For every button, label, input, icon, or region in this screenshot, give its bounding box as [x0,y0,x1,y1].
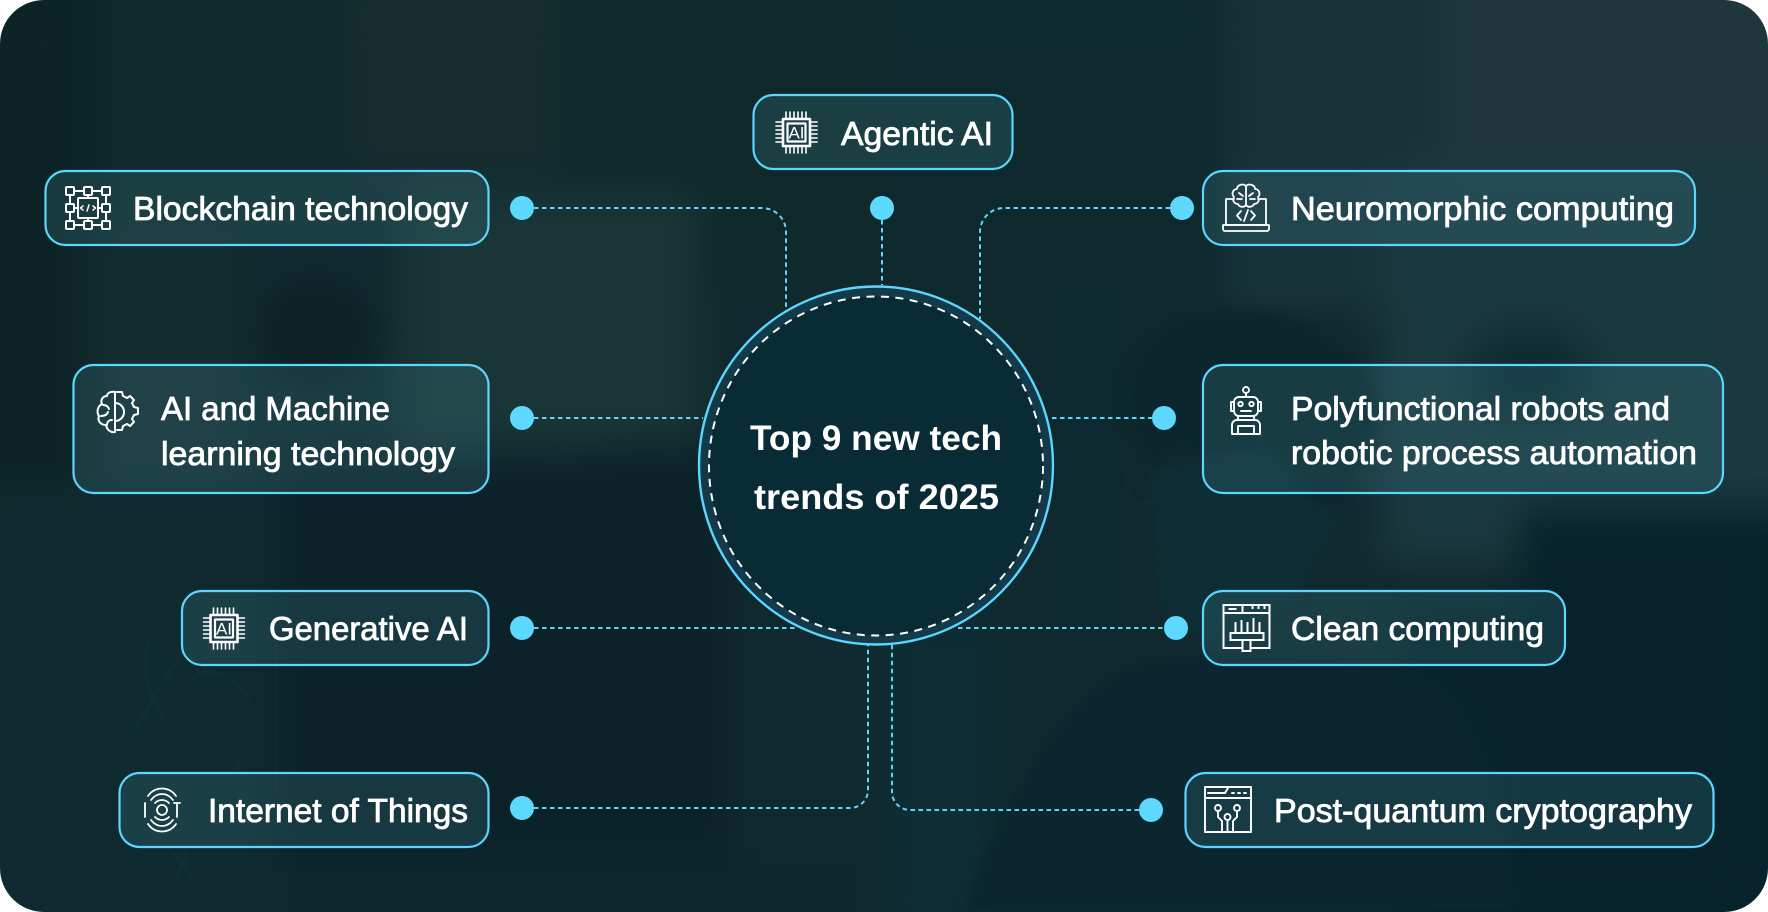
panel: AI and Machine learning technology: AI and Machine [161,390,390,427]
hub title: trends of 2025 [754,478,999,517]
panel: Agentic AI [754,95,1012,169]
panel: Post-quantum cryptography: Post-quantum cryptography [1274,792,1693,829]
panel: Blockchain technology [46,171,488,245]
panel: AI and Machine learning technology: learning technology [161,435,455,472]
hub title: Top 9 new tech [750,419,1002,458]
panel: Generative AI [182,591,488,665]
panel: Polyfunctional robots and robotic process automation: robotic process automation [1291,434,1697,471]
panel: Polyfunctional robots and robotic process automation: Polyfunctional robots and [1291,390,1670,427]
panel: Generative AI: Generative AI [269,610,468,647]
panel: Polyfunctional robots and robotic process automation [1203,365,1723,493]
icon: AI chip: AI [788,124,805,142]
icon: clean screen brush [1224,605,1270,651]
icon: circuit window [1205,787,1251,832]
panel: Neuromorphic computing [1203,171,1695,245]
icon: robot [1231,387,1261,434]
hub title [750,419,1002,517]
icon: AI chip: AI [216,620,232,638]
icon: brain with gear [98,392,138,432]
panel: Clean computing [1203,591,1565,665]
panel: Agentic AI: Agentic AI [841,115,993,152]
panel: Post-quantum cryptography [1186,773,1714,847]
connector lines [534,208,1170,810]
panel: Neuromorphic computing: Neuromorphic computing [1291,190,1674,227]
panel: AI and Machine learning technology [74,365,488,493]
icon: blockchain network [66,187,110,229]
icon: IoT signal [145,788,180,832]
panel: Blockchain technology: Blockchain technology [133,190,469,227]
panel: Clean computing: Clean computing [1291,610,1544,647]
panel: Internet of Things: Internet of Things [208,792,468,829]
panel: Internet of Things [120,773,488,847]
icon: AI chip [776,112,817,153]
icon: brain laptop [1223,185,1269,231]
connector dots [510,196,1194,822]
central hub circle [699,286,1053,644]
icon: AI chip [204,608,244,649]
